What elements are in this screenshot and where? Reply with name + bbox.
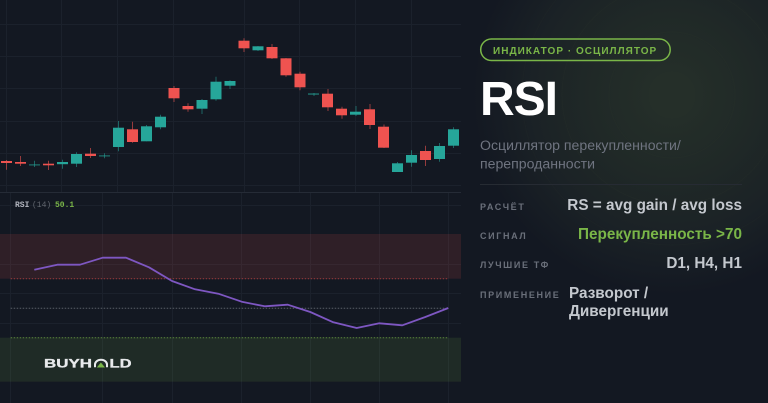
row: application bbox=[480, 285, 669, 320]
subtitle: перепроданности bbox=[480, 156, 595, 172]
row: signal bbox=[480, 226, 742, 243]
logo: buyhold bbox=[44, 358, 132, 370]
row: calculation: РАСЧЁТ bbox=[480, 202, 526, 212]
subtitle: Осциллятор перекупленности/ bbox=[480, 137, 681, 153]
row: signal: Перекупленность >70 bbox=[578, 226, 742, 243]
logo: buyhold: BUYH bbox=[44, 358, 92, 370]
rsi label: (14) bbox=[32, 201, 51, 210]
row: best timeframes bbox=[480, 255, 742, 272]
row: best timeframes: ЛУЧШИЕ ТФ bbox=[480, 260, 550, 270]
row: application: Разворот / bbox=[569, 285, 649, 302]
subtitle bbox=[480, 137, 681, 172]
row: calculation: RS = avg gain / avg loss bbox=[567, 197, 742, 214]
rsi label: RSI bbox=[15, 201, 30, 210]
logo: buyhold: LD bbox=[110, 358, 132, 370]
row: best timeframes: D1, H4, H1 bbox=[666, 255, 742, 272]
rsi label bbox=[15, 201, 74, 210]
row: application: Дивергенции bbox=[569, 303, 669, 320]
rsi overbought zone bbox=[0, 234, 461, 279]
oversold level line bbox=[11, 337, 448, 339]
rsi line bbox=[34, 258, 448, 328]
overbought level line bbox=[11, 278, 448, 280]
badge: indicator oscillator bbox=[481, 39, 670, 60]
row: signal: СИГНАЛ bbox=[480, 231, 527, 241]
midline level bbox=[11, 307, 448, 309]
row: calculation bbox=[480, 197, 742, 214]
candlestick chart bbox=[1, 38, 459, 172]
badge: indicator oscillator: ИНДИКАТОР · ОСЦИЛЛЯТОР bbox=[493, 46, 657, 57]
background glow bbox=[472, 0, 768, 295]
title: RSI bbox=[480, 73, 557, 126]
rsi oversold zone bbox=[0, 338, 461, 382]
row: application: ПРИМЕНЕНИЕ bbox=[480, 290, 560, 300]
rsi label: 50.1 bbox=[55, 201, 74, 210]
